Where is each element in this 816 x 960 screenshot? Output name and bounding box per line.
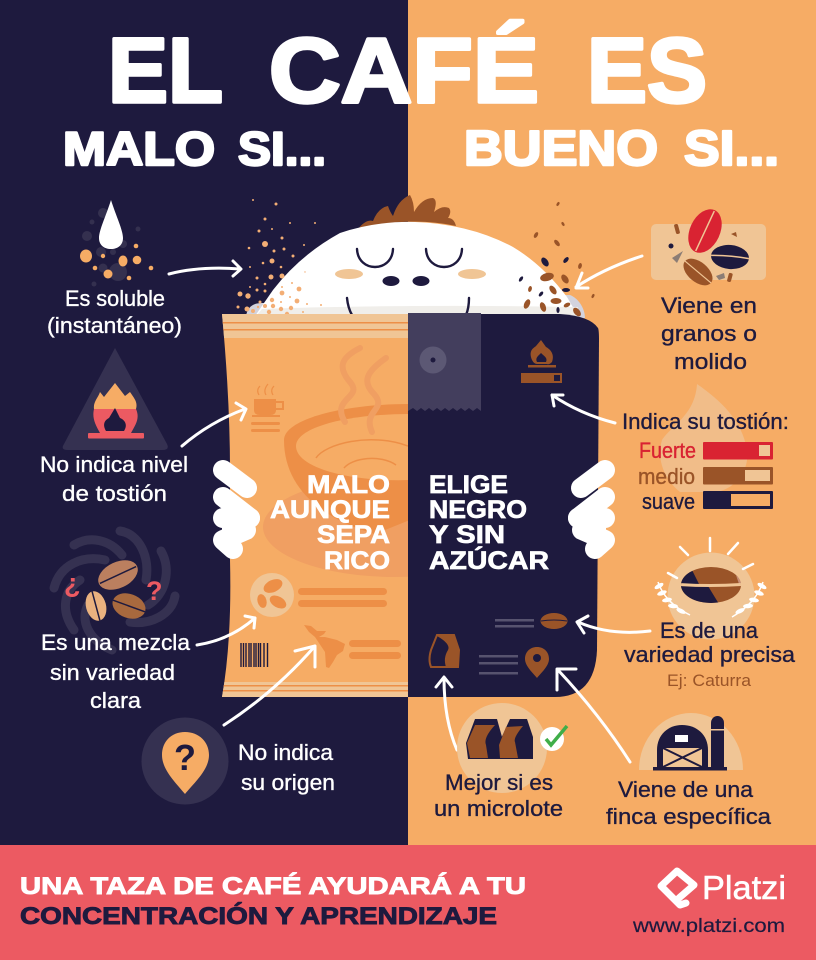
coffee grains (beans or ground) (518, 201, 595, 318)
left item: no origin: su origen (241, 770, 335, 795)
label: Es de una (660, 618, 759, 643)
roast light (642, 489, 773, 514)
arrow: roast (552, 395, 615, 423)
bag text: malo aunque sepa rico (270, 471, 390, 575)
title (108, 19, 707, 122)
label lines (298, 588, 401, 659)
heading: bueno si: SI... (684, 122, 779, 176)
background: orange right side (408, 0, 816, 845)
right item: precise variety (624, 538, 796, 690)
footer message: UNA TAZA DE CAFÉ AYUDARÁ A TU (20, 872, 526, 900)
hair (358, 195, 456, 229)
heading: malo si: SI... (238, 122, 326, 175)
powder particles (soluble coffee) (236, 199, 322, 316)
right item: microlot: un microlote (434, 796, 563, 821)
background: dark left side (0, 0, 408, 845)
footer banner (0, 845, 816, 960)
icon: swirl (54, 531, 175, 650)
right item: specific farm: finca específica (606, 804, 772, 829)
bag text: malo aunque sepa rico: RICO (324, 547, 390, 575)
face dome (255, 222, 578, 316)
website: www.platzi.com (632, 916, 785, 937)
nose (382, 276, 430, 286)
right item: specific farm (606, 713, 772, 829)
cheeks (335, 269, 486, 279)
hand: left (222, 470, 250, 550)
label: Es una mezcla (41, 630, 191, 655)
left item: blend (41, 531, 191, 713)
icon: bean with laurels and rays (654, 538, 767, 640)
collar shadow (256, 306, 578, 316)
icon: question pin (142, 718, 228, 804)
bottom stripes (220, 682, 408, 697)
Platzi logo: Platzi (702, 869, 786, 906)
roast light: suave (642, 489, 695, 514)
icon: drop with dots (80, 200, 153, 286)
footer message: CONCENTRACIÓN Y APRENDIZAJE (20, 902, 497, 930)
character: sleepy head (246, 195, 585, 318)
label: Mejor si es (445, 770, 553, 795)
icon: flame and roast bar (521, 340, 562, 383)
beans (82, 554, 149, 623)
title: ES (587, 20, 707, 122)
title: CAFÉ (269, 19, 539, 122)
right item: precise variety: variedad precisa (624, 642, 796, 667)
icon: question pin: ? (174, 737, 196, 778)
top stripes (220, 314, 408, 338)
label lines (479, 619, 534, 674)
arrow: soluble (169, 261, 241, 276)
cup (284, 404, 410, 534)
right item: beans or ground: molido (674, 349, 747, 374)
roast strong (639, 438, 773, 463)
icon: barn and silo (639, 713, 743, 770)
faint flame (660, 384, 747, 492)
question marks: ? (146, 576, 162, 606)
hand: right (578, 470, 606, 550)
left item: soluble: (instantáneo) (47, 313, 182, 338)
icon: map of Latin America (304, 625, 345, 668)
arrow: roast level (182, 403, 246, 446)
icon: triangle and flame (63, 348, 168, 450)
left item: no origin (142, 718, 335, 804)
bag text: malo aunque sepa rico: SEPA (317, 521, 390, 549)
icon: beans circle (250, 573, 294, 617)
bag text: elige negro y sin azucar: NEGRO (429, 496, 527, 524)
heading: bueno si (464, 122, 779, 176)
question marks (64, 568, 162, 606)
arrow: farm (557, 669, 630, 762)
left item: blend: sin variedad (50, 660, 175, 685)
right item: roast level (622, 384, 789, 514)
roast medium: medio (638, 464, 695, 489)
bag text: elige negro y sin azucar (429, 471, 549, 575)
left item: soluble (47, 200, 182, 338)
arrow: blend (197, 616, 255, 645)
heading: bueno si: BUENO (464, 122, 658, 176)
heading: malo si (63, 122, 326, 175)
label: Viene en (661, 293, 757, 318)
label: Indica su tostión: (622, 409, 789, 434)
icon: beans card (651, 204, 766, 291)
icon: two bags and check (457, 703, 567, 793)
icon: small bag (430, 635, 459, 667)
right item: microlot (434, 703, 567, 821)
shoulders (246, 295, 585, 318)
icon: location pin (525, 647, 549, 678)
roast strong: Fuerte (639, 438, 696, 463)
label: No indica nivel (40, 452, 188, 477)
arrow: beans (576, 256, 642, 288)
bag text: elige negro y sin azucar: Y SIN (429, 521, 505, 549)
label: No indica (238, 740, 334, 765)
left item: no roast level: de tostión (62, 481, 167, 506)
heading: malo si: MALO (63, 122, 215, 175)
label: Viene de una (618, 777, 754, 802)
arrow: microlot (436, 677, 457, 750)
eyes and mouth (347, 249, 469, 315)
saucer (263, 492, 408, 577)
footer message (20, 872, 526, 930)
arrow: variety (577, 616, 650, 633)
title: EL (108, 20, 223, 122)
question marks: ¿ (64, 568, 80, 598)
icon: small cup with steam (251, 384, 283, 432)
label: Es soluble (65, 286, 165, 311)
left item: no roast level (40, 348, 188, 506)
bag text: elige negro y sin azucar: AZÚCAR (429, 545, 549, 575)
tape with valve (408, 313, 481, 411)
roast medium (638, 464, 773, 489)
coffee bag: orange left half (222, 314, 408, 697)
coffee bag: navy right half (408, 313, 599, 697)
right item: beans or ground: granos o (661, 321, 757, 346)
left item: blend: clara (90, 688, 142, 713)
bag text: elige negro y sin azucar: ELIGE (429, 471, 508, 499)
right item: precise variety: Ej: Caturra (667, 671, 752, 690)
bag text: malo aunque sepa rico: AUNQUE (270, 496, 390, 524)
barcode (241, 643, 268, 667)
bag text: malo aunque sepa rico: MALO (307, 471, 390, 499)
steam (341, 348, 386, 432)
Platzi logo (661, 869, 786, 906)
icon: small bean (540, 613, 568, 629)
right item: beans or ground (651, 204, 766, 374)
arrow: origin (224, 646, 315, 725)
